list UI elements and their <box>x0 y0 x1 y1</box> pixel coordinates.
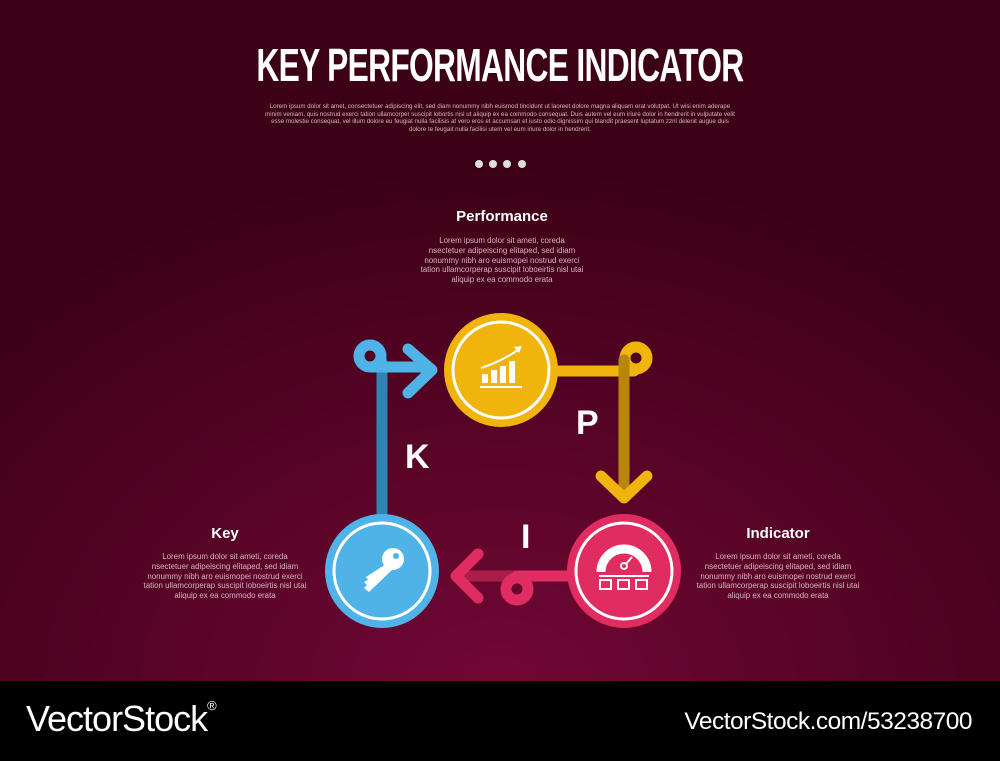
heading: Performance: Performance <box>456 208 548 225</box>
icon: gauge <box>599 549 649 589</box>
arrow: pink I <box>456 554 572 600</box>
arrow: blue K <box>359 345 432 530</box>
title: KEY PERFORMANCE INDICATOR <box>256 39 744 91</box>
circle: Indicator <box>567 514 681 628</box>
text: Key: Lorem ipsum dolor sit ameti, coreda nsectetuer adipeiscing elitaped, sed idiam nonummy nibh aro euismopei nostrud exerci tation ullamcorperap suscipit loboeirtis nisl utai aliquip ex ea commodo erata <box>144 552 306 600</box>
letter K: K <box>405 438 430 476</box>
heading: Key: Key <box>211 525 239 542</box>
text: Indicator: Lorem ipsum dolor sit ameti, coreda nsectetuer adipeiscing elitaped, sed idiam nonummy nibh aro euismopei nostrud exerci tation ullamcorperap suscipit loboeirtis nisl utai aliquip ex ea commodo erata <box>697 552 859 600</box>
dots <box>475 160 526 168</box>
circle: Key <box>325 514 439 628</box>
letter P: P <box>576 404 599 442</box>
intro text: Lorem ipsum dolor sit amet, consectetuer adipiscing elit, sed diam nonummy nibh euismod tincidunt ut laoreet dolore magna aliquam erat volutpat. Ut wisi enim aderape minim veniam, quis nostrud exerci tation ullamcorper suscipit lobortis nisl ut aliquip ex ea commodo consequat. Duis autem vel eum iriure dolor in hendrerit in vulputate velit esse molestie consequat, vel illum dolore eu feugiat nulla facilisis at vero eros et accumsan et iusto odio dignissim qui blandit praesent luptatum zzril delenit augue duis dolore te feugait nulla facilisi utem vel eum iriure dolor in hendrerit. <box>265 103 735 133</box>
footer: VectorStock.com/53238700 <box>684 708 972 735</box>
circle: Performance <box>444 313 558 427</box>
icon: key <box>364 548 404 592</box>
footer: VectorStock® <box>26 698 216 739</box>
heading: Indicator: Indicator <box>746 525 810 542</box>
icon: chart <box>480 346 522 388</box>
arrow: yellow P <box>552 347 647 498</box>
footer <box>0 681 1000 761</box>
letter I: I <box>521 518 530 556</box>
text: Performance: Lorem ipsum dolor sit ameti, coreda nsectetuer adipeiscing elitaped, sed idiam nonummy nibh aro euismopei nostrud exerci tation ullamcorperap suscipit loboeirtis nisl utai aliquip ex ea commodo erata <box>421 236 583 284</box>
